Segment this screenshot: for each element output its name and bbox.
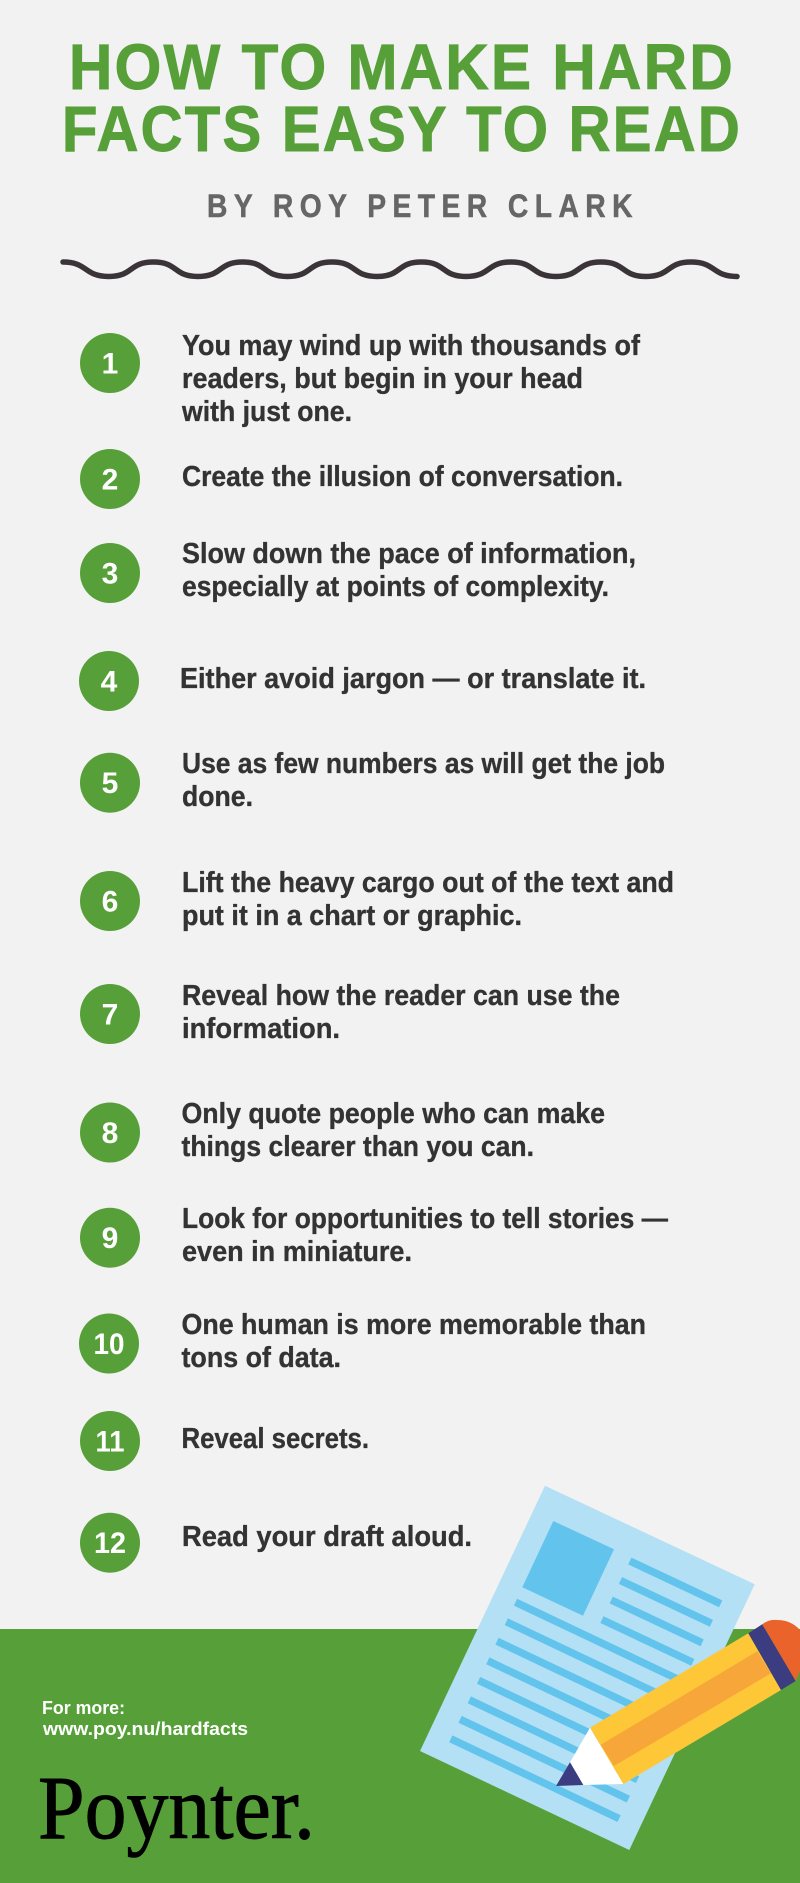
item 3	[80, 538, 636, 603]
item 5: 5	[102, 767, 118, 800]
item 3: 3	[102, 558, 118, 590]
item 2	[80, 449, 623, 509]
item 4	[79, 651, 646, 711]
item 3: especially at points of complexity.	[182, 571, 609, 603]
item 1: with just one.	[181, 396, 352, 428]
item 9: Look for opportunities to tell stories —	[182, 1203, 668, 1235]
item 5: Use as few numbers as will get the job	[182, 748, 665, 780]
icon: pencil	[556, 1620, 800, 1786]
item 3: Slow down the pace of information,	[182, 538, 636, 570]
footer band	[0, 1629, 800, 1883]
item 7: Reveal how the reader can use the	[182, 980, 620, 1012]
item 7	[80, 980, 620, 1045]
item 10	[79, 1309, 646, 1374]
title: HOW TO MAKE HARD	[69, 31, 735, 103]
item 2: 2	[102, 464, 118, 496]
byline: BY ROY PETER CLARK	[207, 188, 639, 224]
item 6: put it in a chart or graphic.	[182, 900, 522, 932]
item 1: readers, but begin in your head	[182, 363, 583, 395]
item 8: things clearer than you can.	[182, 1131, 534, 1163]
footer link text: www.poy.nu/hardfacts	[42, 1719, 248, 1739]
item 6: Lift the heavy cargo out of the text and	[182, 867, 674, 899]
footer link text: For more:	[42, 1698, 125, 1718]
item 12	[80, 1513, 472, 1573]
Poynter logo: Poynter.	[38, 1759, 315, 1858]
item 10: tons of data.	[182, 1342, 341, 1374]
title: FACTS EASY TO READ	[62, 93, 742, 165]
icon: document	[420, 1486, 755, 1850]
item 8	[80, 1098, 605, 1163]
wavy divider	[63, 262, 737, 276]
item 11: 11	[96, 1426, 124, 1458]
item 1	[80, 330, 640, 428]
item 6: 6	[102, 886, 118, 918]
item 10: 10	[94, 1328, 124, 1361]
item 2: Create the illusion of conversation.	[182, 461, 623, 493]
item 5: done.	[182, 781, 253, 813]
item 12: 12	[94, 1527, 126, 1560]
item 9: even in miniature.	[182, 1236, 412, 1268]
footer link text	[42, 1698, 248, 1739]
item 7: information.	[182, 1013, 340, 1045]
title	[62, 31, 742, 165]
item 4: 4	[101, 666, 118, 698]
item 8: 8	[102, 1117, 118, 1150]
item 5	[80, 748, 665, 813]
item 10: One human is more memorable than	[182, 1309, 646, 1341]
item 9	[80, 1203, 668, 1268]
item 8: Only quote people who can make	[182, 1098, 605, 1130]
item 6	[80, 867, 674, 932]
item 11	[80, 1411, 369, 1471]
item 4: Either avoid jargon — or translate it.	[180, 663, 646, 695]
item 1: You may wind up with thousands of	[182, 330, 640, 362]
item 11: Reveal secrets.	[182, 1423, 369, 1455]
item 9: 9	[102, 1222, 118, 1255]
item 7: 7	[102, 998, 118, 1032]
item 1: 1	[102, 348, 118, 380]
item 12: Read your draft aloud.	[182, 1521, 472, 1553]
